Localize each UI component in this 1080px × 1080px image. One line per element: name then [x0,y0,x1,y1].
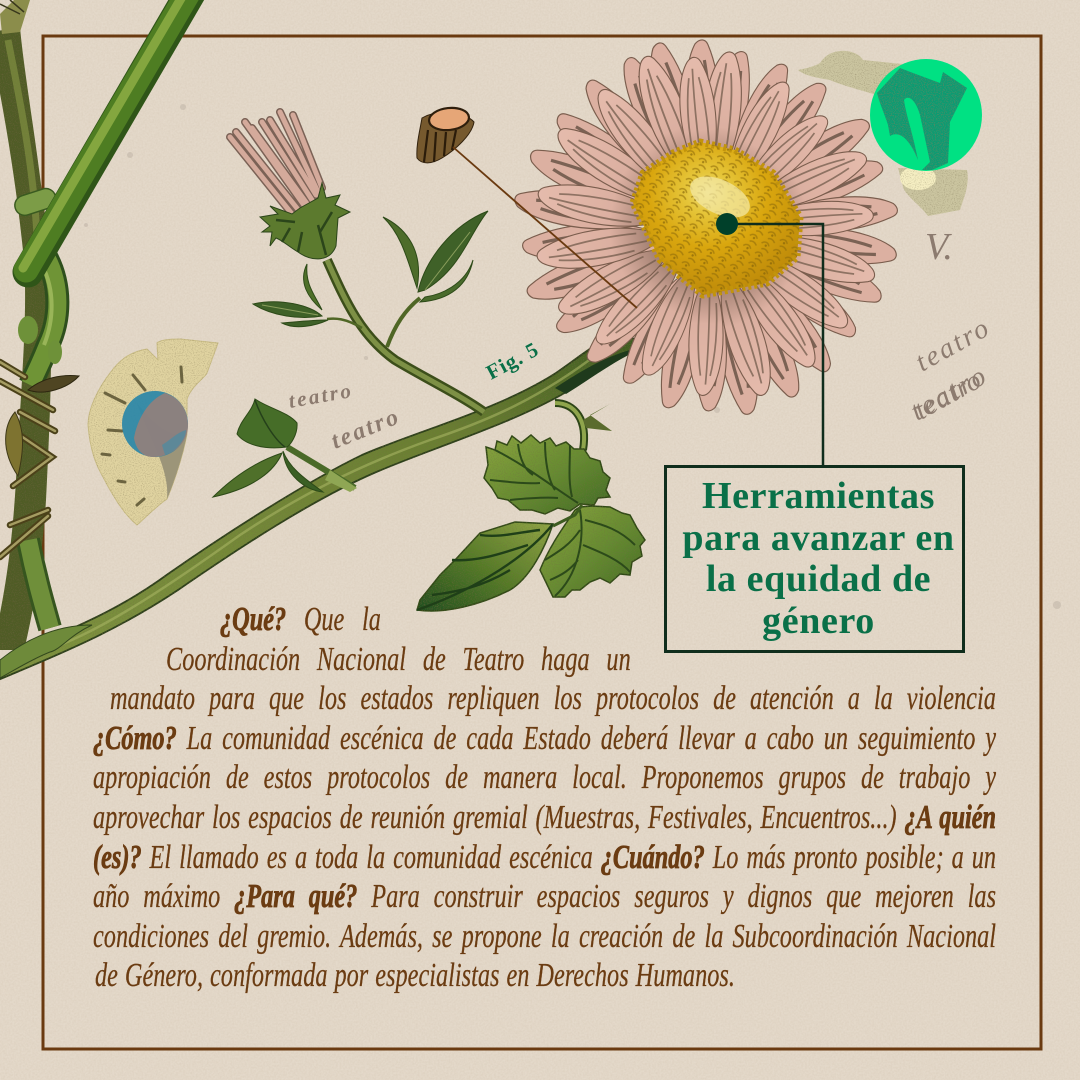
illustration: bud stem and small leaves [253,211,488,412]
small script labels: teatro: teatro [905,359,994,427]
pointer line from flower to title [716,213,823,466]
body text: apropiación de estos protocolos de manera local. Proponemos grupos de trabajo y [93,758,996,796]
illustration: main branch [0,332,648,680]
small script labels: teatro: teatro [910,312,996,378]
illustration: grey form behind green circle [798,51,968,216]
title box: Herramientas [702,475,935,517]
flower center [633,142,800,295]
illustration: pink daisy flower [512,39,899,417]
body text: (es)? El llamado es a toda la comunidad escénica ¿Cuándo? Lo más pronto posible; a un [93,838,996,876]
back petals [512,39,899,417]
body text: año máximo ¿Para qué? Para construir espacios seguros y dignos que mejoren las [93,878,996,914]
body text: mandato para que los estados repliquen los protocolos de atención a la violencia [110,680,996,716]
body text: ¿Qué? Que la [220,600,381,638]
illustration: flower bud [230,112,350,259]
body text: ¿Cómo? La comunidad escénica de cada Estado deberá llevar a cabo un seguimiento y [93,720,996,756]
illustration: small dark leaves on branch [213,399,357,497]
body text: Coordinación Nacional de Teatro haga un [166,640,631,678]
illustration: beige shell with blue circle [88,339,218,525]
title box: la equidad de [706,558,931,600]
title box: género [762,600,875,642]
small script labels: teatro [287,226,996,455]
small script labels: teatro: V. [925,226,953,268]
title box: para avanzar en [682,517,955,559]
small script labels: teatro: teatro [909,364,987,426]
green circle [870,59,982,171]
illustration: left climbing stems [0,0,192,650]
body text: de Género, conformada por especialistas en Derechos Humanos. [95,956,735,994]
front petals [534,50,880,400]
body text: condiciones del gremio. Además, se propone la creación de la Subcoordinación Nacional [93,918,996,954]
title box [664,465,965,653]
illustration: seed pod [417,106,474,163]
figure label: Fig. 5 [482,337,543,384]
body text: aprovechar los espacios de reunión gremial (Muestras, Festivales, Encuentros...) ¿A quién [93,798,996,836]
small script labels: teatro: teatro [287,378,355,413]
illustration: large serrated leaves [417,435,645,611]
illustration: tied twigs [0,362,79,557]
small script labels: teatro: teatro [328,403,404,455]
pointer line from seed pod into flower [453,147,637,308]
